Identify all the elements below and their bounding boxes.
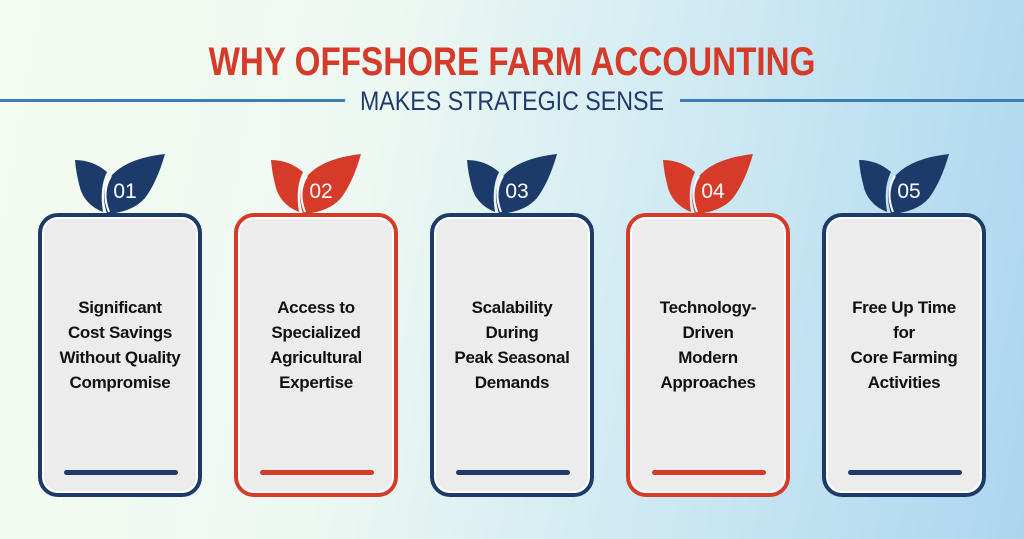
card text 5: Free Up Time bbox=[852, 298, 956, 317]
card text 1: Significant bbox=[78, 298, 162, 317]
card text 4: Driven bbox=[682, 323, 734, 342]
icon: leaf 02 bbox=[271, 154, 361, 213]
icon: leaf 02: 02 bbox=[309, 180, 333, 203]
card text 1: Without Quality bbox=[60, 348, 180, 367]
card 1 bbox=[38, 213, 202, 497]
card text 2: Agricultural bbox=[270, 348, 362, 367]
card 5 bbox=[822, 213, 986, 497]
title: WHY OFFSHORE FARM ACCOUNTING bbox=[209, 40, 815, 84]
card text 1: Cost Savings bbox=[68, 323, 172, 342]
icon: leaf 01 bbox=[75, 154, 165, 213]
subtitle: MAKES STRATEGIC SENSE bbox=[360, 86, 664, 116]
card text 1: Compromise bbox=[70, 373, 170, 392]
icon: leaf 05 bbox=[859, 154, 949, 213]
card text 5 bbox=[851, 298, 957, 392]
card text 4 bbox=[660, 298, 756, 392]
card text 5: Core Farming bbox=[851, 348, 957, 367]
icon: leaf 01: 01 bbox=[113, 180, 137, 203]
card text 2: Access to bbox=[277, 298, 355, 317]
card text 3: Demands bbox=[475, 373, 549, 392]
card text 3: Scalability bbox=[472, 298, 552, 317]
icon: leaf 04: 04 bbox=[701, 180, 725, 203]
card text 4: Approaches bbox=[660, 373, 756, 392]
card 2 bbox=[234, 213, 398, 497]
card text 2 bbox=[270, 298, 362, 392]
card text 2: Specialized bbox=[271, 323, 361, 342]
card text 4: Modern bbox=[678, 348, 738, 367]
icon: leaf 05: 05 bbox=[897, 180, 921, 203]
card text 3: Peak Seasonal bbox=[454, 348, 570, 367]
icon: leaf 03: 03 bbox=[505, 180, 529, 203]
card text 4: Technology- bbox=[660, 298, 756, 317]
card text 1 bbox=[60, 298, 181, 392]
card 4 bbox=[626, 213, 790, 497]
card text 3: During bbox=[486, 323, 538, 342]
card text 2: Expertise bbox=[279, 373, 353, 392]
card 3 bbox=[430, 213, 594, 497]
icon: leaf 03 bbox=[467, 154, 557, 213]
card text 5: for bbox=[893, 323, 915, 342]
icon: leaf 04 bbox=[663, 154, 753, 213]
card text 3 bbox=[454, 298, 570, 392]
card text 5: Activities bbox=[868, 373, 940, 392]
